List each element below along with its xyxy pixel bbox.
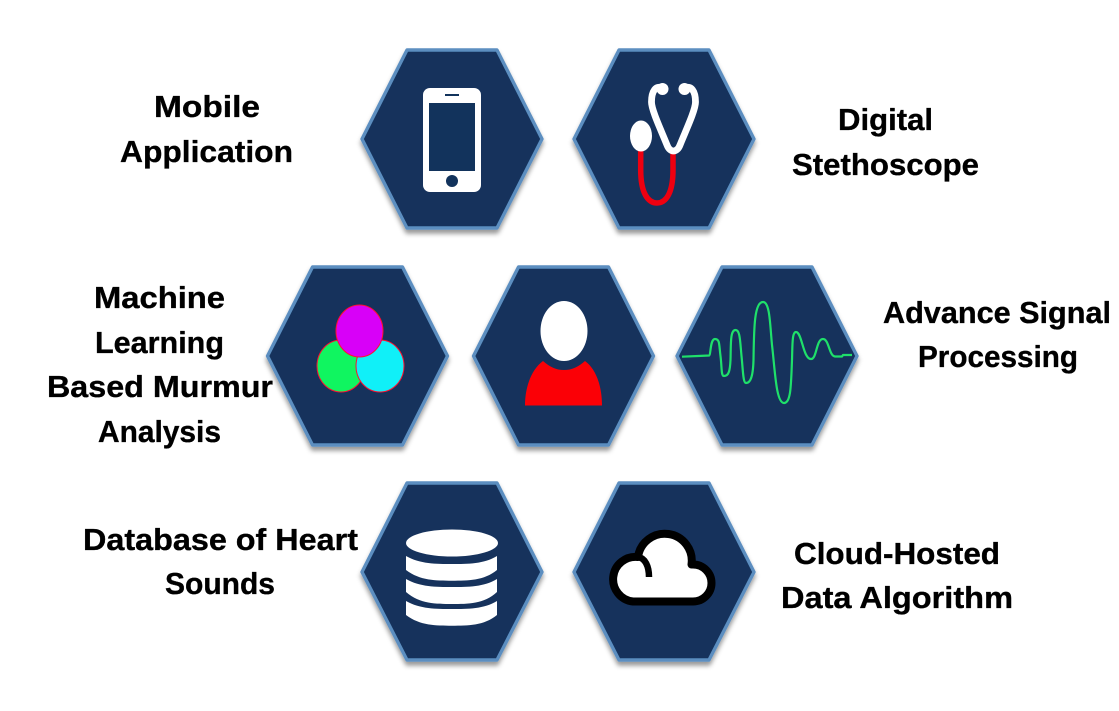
label: machine learning based murmur analysis: Machine bbox=[94, 280, 225, 315]
label: database of heart sounds bbox=[83, 522, 358, 601]
label: machine learning based murmur analysis: Analysis bbox=[98, 414, 221, 449]
icon: cloud bbox=[613, 534, 712, 602]
hexagon: signal processing bbox=[677, 267, 857, 445]
icon: waveform bbox=[682, 302, 852, 403]
hexagon: mobile application bbox=[362, 50, 542, 228]
label: advance signal processing bbox=[883, 295, 1111, 374]
label: mobile application: Application bbox=[120, 134, 293, 169]
label: cloud-hosted data algorithm: Cloud-Hosted bbox=[794, 536, 1000, 571]
icon: database cylinder bbox=[406, 530, 498, 626]
label: mobile application bbox=[120, 89, 293, 169]
label: database of heart sounds: Database of Heart bbox=[83, 522, 358, 557]
icon: stethoscope bbox=[630, 83, 696, 203]
hexagon: database bbox=[362, 483, 542, 660]
label: machine learning based murmur analysis bbox=[47, 280, 273, 449]
label: machine learning based murmur analysis: Learning bbox=[95, 325, 224, 360]
label: digital stethoscope: Digital bbox=[838, 102, 933, 137]
label: digital stethoscope: Stethoscope bbox=[792, 147, 979, 182]
icon: person bbox=[525, 301, 602, 406]
label: cloud-hosted data algorithm bbox=[781, 536, 1013, 615]
icon: three overlapping clusters bbox=[317, 305, 404, 392]
hexagon: machine learning bbox=[268, 267, 448, 445]
label: advance signal processing: Processing bbox=[918, 339, 1078, 374]
hexagon: user bbox=[474, 267, 654, 445]
label: digital stethoscope bbox=[792, 102, 979, 182]
label: advance signal processing: Advance Signal bbox=[883, 295, 1111, 330]
label: machine learning based murmur analysis: Based Murmur bbox=[47, 369, 273, 404]
label: cloud-hosted data algorithm: Data Algorithm bbox=[781, 580, 1013, 615]
hexagon: cloud bbox=[574, 483, 754, 660]
label: mobile application: Mobile bbox=[154, 89, 260, 124]
hexagon: digital stethoscope bbox=[574, 50, 754, 228]
label: database of heart sounds: Sounds bbox=[165, 566, 275, 601]
icon: smartphone bbox=[423, 88, 481, 192]
